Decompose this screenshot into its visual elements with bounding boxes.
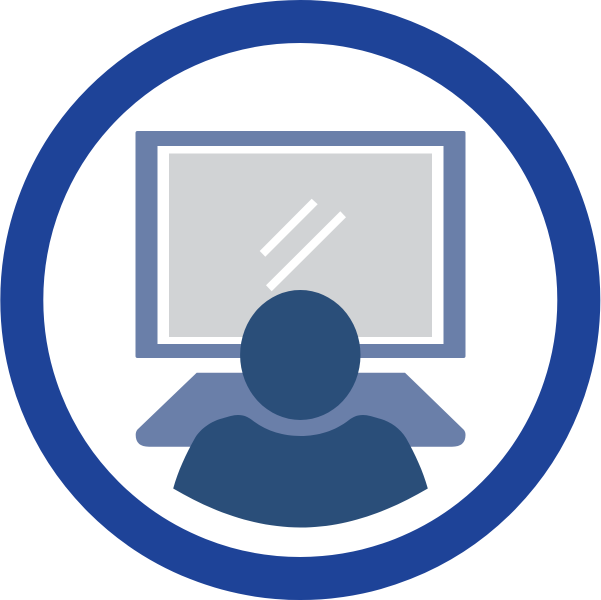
icon: computer monitor (136, 131, 466, 358)
person body (173, 415, 428, 528)
monitor frame (136, 131, 466, 358)
person head (240, 290, 360, 420)
icon: glass reflection lines (260, 199, 346, 291)
icon: desk (136, 373, 465, 447)
screen border (158, 146, 444, 344)
screen glass (169, 154, 432, 337)
icon: person (173, 290, 428, 528)
